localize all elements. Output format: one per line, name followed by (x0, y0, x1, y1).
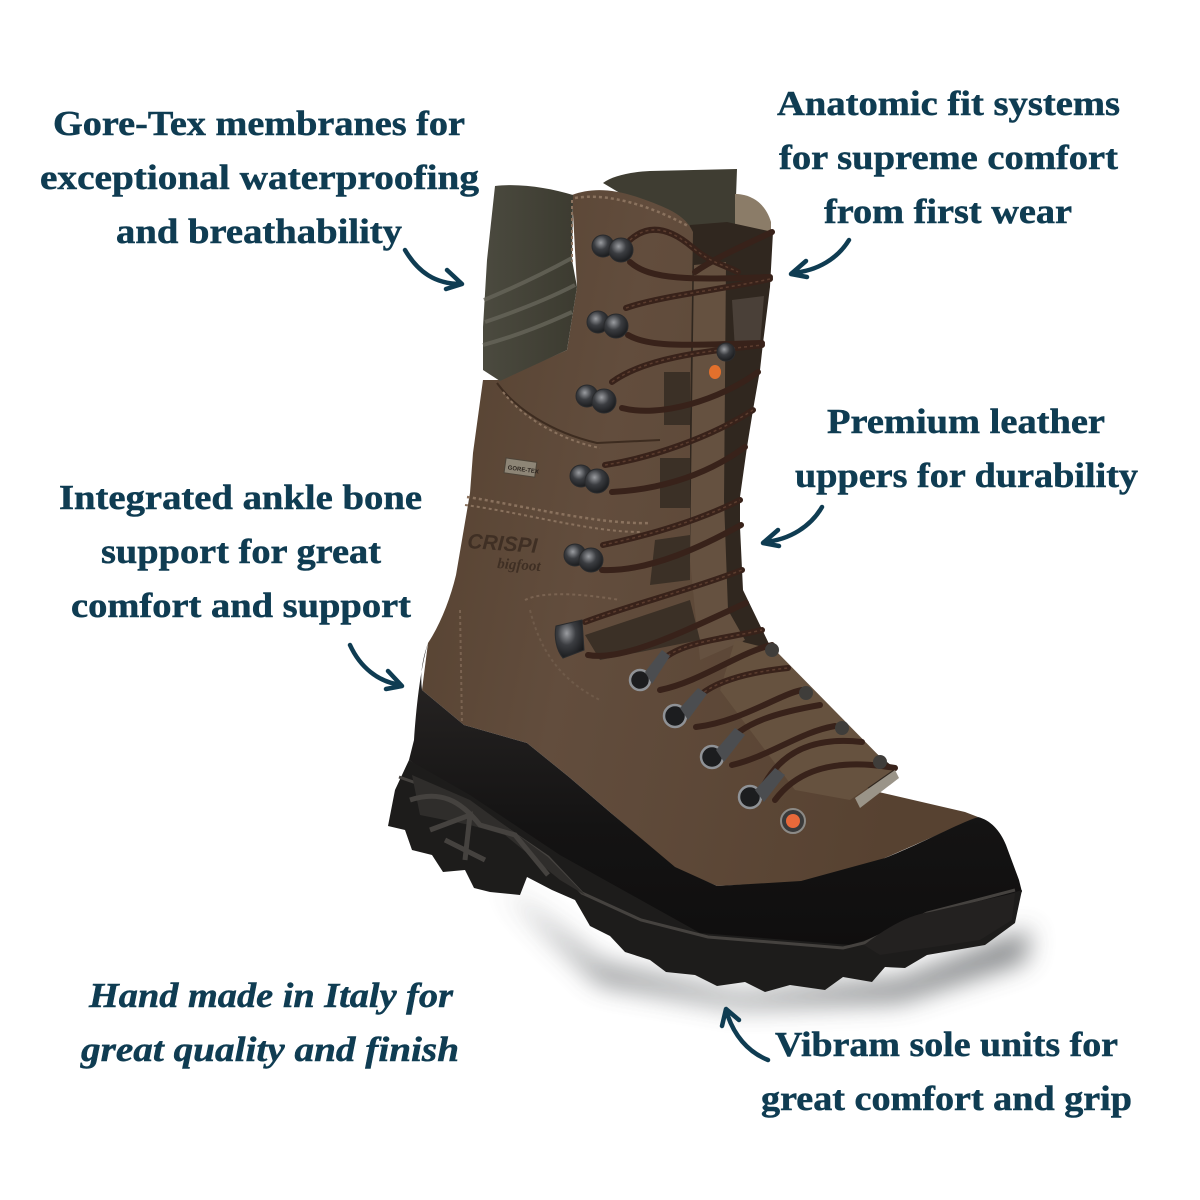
stitching and seams (460, 197, 688, 725)
boot shadow (500, 885, 1030, 1006)
arrow: vibram sole (722, 1009, 768, 1060)
laces (585, 230, 895, 800)
callout: gore-tex: Gore-Tex membranes for (53, 104, 465, 143)
callout: vibram sole (761, 1025, 1132, 1118)
speckled lace-side panel (732, 296, 764, 350)
callout: hand made in Italy: Hand made in Italy for (88, 976, 453, 1015)
callout: gore-tex: and breathability (116, 212, 403, 251)
callout: anatomic fit (777, 84, 1120, 231)
logo emboss (467, 530, 542, 575)
callout: ankle support: comfort and support (71, 586, 411, 625)
illustration: hiking boot (388, 169, 1022, 992)
logo emboss: bigfoot (497, 556, 542, 575)
toe tongue strip (720, 640, 893, 800)
callout: gore-tex: exceptional waterproofing (40, 158, 480, 197)
callout: ankle support: Integrated ankle bone (59, 478, 422, 517)
callout: premium leather: uppers for durability (795, 456, 1139, 495)
green padded collar (483, 185, 577, 381)
orange speed eyelet, toe (781, 809, 805, 833)
lighter tongue strip (690, 262, 745, 660)
orange speed eyelet, ankle (709, 365, 721, 379)
right side lace hooks (765, 643, 887, 769)
callout: hand made in Italy (80, 976, 459, 1069)
outsole (388, 760, 1022, 992)
callout: vibram sole: great comfort and grip (761, 1079, 1132, 1118)
arrow: anatomic fit (791, 240, 849, 277)
callout: premium leather: Premium leather (827, 402, 1105, 441)
upper lace hooks (555, 235, 735, 658)
callout: premium leather (795, 402, 1139, 495)
fleece lining (735, 194, 771, 240)
logo emboss: CRISPI (467, 530, 539, 558)
brown leather upper (422, 190, 978, 886)
arrow: gore-tex (405, 250, 462, 289)
callout: gore-tex (40, 104, 480, 251)
lace highlights (585, 230, 788, 705)
callout: vibram sole: Vibram sole units for (775, 1025, 1118, 1064)
dark gusset panels (585, 372, 700, 660)
toe gore-tex strip (855, 770, 899, 808)
rear tongue collar (603, 169, 737, 240)
callout: ankle support: support for great (101, 532, 381, 571)
lower eyelets (630, 650, 785, 808)
gore-tex tag: GORE-TEX (507, 465, 539, 476)
lace area backing (640, 222, 897, 800)
callout: hand made in Italy: great quality and finish (80, 1030, 459, 1069)
callout: anatomic fit: Anatomic fit systems (777, 84, 1120, 123)
callout: anatomic fit: for supreme comfort (779, 138, 1118, 177)
rubber rand and toe cap (409, 643, 1022, 950)
arrow: ankle support (350, 645, 402, 689)
callout: anatomic fit: from first wear (824, 192, 1072, 231)
arrow: premium leather (763, 507, 822, 546)
callout: ankle support (59, 478, 422, 625)
gore-tex tag (504, 458, 539, 477)
